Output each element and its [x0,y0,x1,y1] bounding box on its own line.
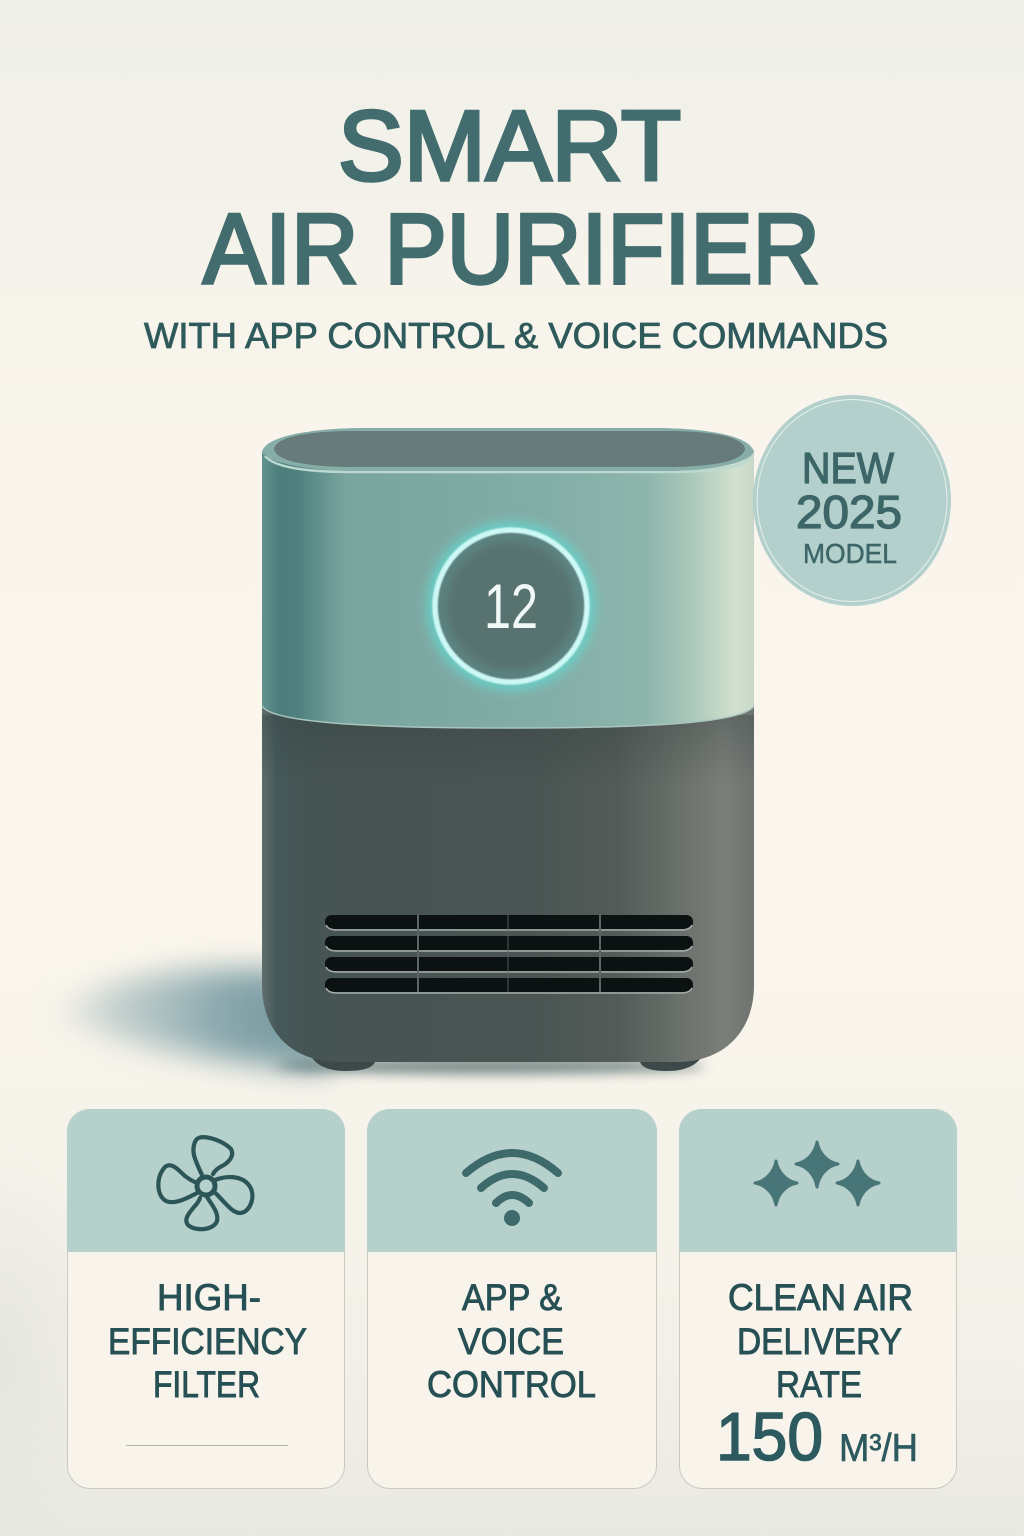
feet [311,1050,702,1071]
label: app and voice control: CONTROL [427,1364,596,1405]
display: air quality 12 [434,529,588,683]
badge: new 2025 model [753,395,951,606]
label: clean air delivery rate: RATE [776,1364,862,1405]
title [203,90,820,304]
label: clean air delivery rate [728,1277,913,1405]
stat: 150 m3/h: M³/H [839,1427,918,1470]
upper body [262,428,754,728]
badge: new 2025 model: NEW [802,444,894,493]
icon: sparkles [755,1142,879,1205]
badge: new 2025 model: MODEL [803,538,897,569]
title: AIR PURIFIER [203,193,820,304]
lower body [262,700,754,1062]
title: SMART [338,90,681,201]
display: air quality 12: 12 [484,572,538,642]
icon: wifi [466,1153,558,1226]
panel: high-efficiency filter [67,1109,345,1488]
label: app and voice control: VOICE [458,1321,564,1362]
icon: fan [158,1137,252,1229]
label: clean air delivery rate: CLEAN AIR [728,1277,913,1318]
label: app and voice control: APP & [462,1277,562,1318]
label: app and voice control [427,1277,596,1405]
label: high-efficiency filter: FILTER [153,1364,260,1405]
stat: 150 m3/h [716,1399,918,1475]
panel: app and voice control [367,1109,657,1488]
stat: 150 m3/h: 150 [716,1399,823,1475]
panel: clean air delivery rate [679,1109,957,1488]
label: high-efficiency filter: EFFICIENCY [108,1321,307,1362]
floor shadow [50,969,705,1074]
label: high-efficiency filter [108,1277,307,1405]
label: high-efficiency filter: HIGH- [157,1277,261,1318]
product: air purifier [50,428,754,1074]
subtitle: WITH APP CONTROL & VOICE COMMANDS [144,315,888,356]
label: clean air delivery rate: DELIVERY [737,1321,902,1362]
vents [325,915,693,993]
badge: new 2025 model: 2025 [796,486,902,538]
